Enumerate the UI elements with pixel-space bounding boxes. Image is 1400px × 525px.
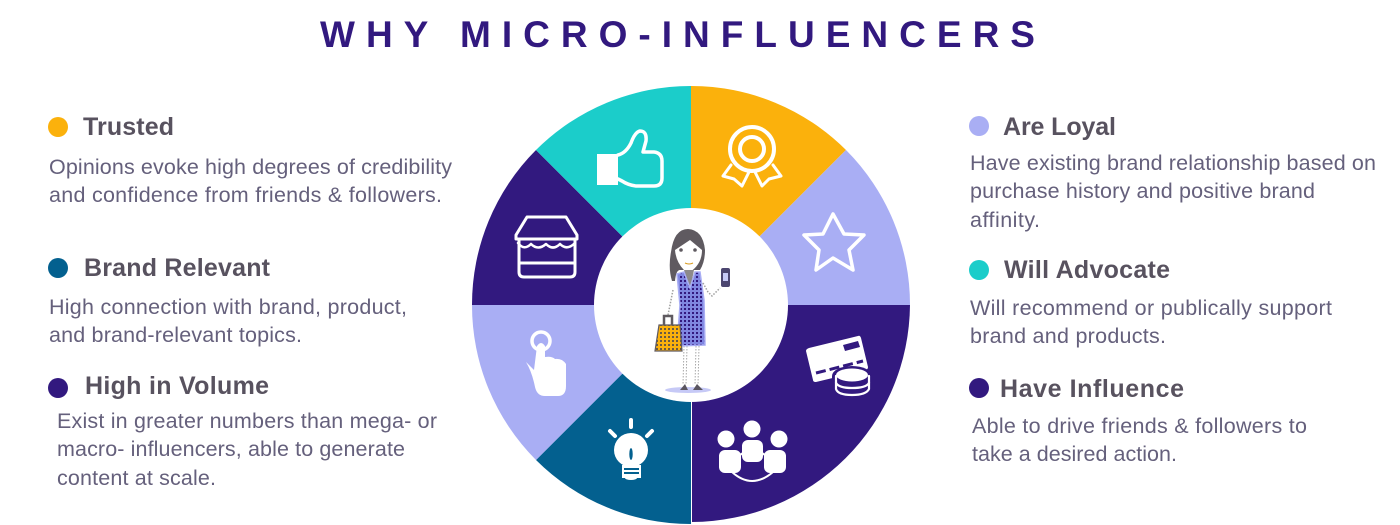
face bbox=[675, 240, 702, 272]
icon: light bulb bbox=[610, 420, 652, 480]
neck bbox=[684, 270, 694, 290]
icon: thumbs up bbox=[597, 131, 662, 186]
hair bbox=[670, 229, 705, 281]
icon: tap hand bbox=[526, 332, 566, 396]
item: Trusted: Opinions evoke high degrees of credibility bbox=[49, 155, 452, 179]
shoes bbox=[680, 384, 703, 390]
item: Will Advocate: Will Advocate bbox=[1004, 256, 1170, 284]
icon: award ribbon bbox=[723, 127, 781, 186]
donut wheel bbox=[472, 86, 910, 524]
item: Have Influence bbox=[969, 375, 1307, 466]
arms bbox=[668, 283, 720, 315]
item: Trusted bbox=[48, 113, 452, 207]
item: Are Loyal: Have existing brand relationship based on bbox=[970, 151, 1376, 175]
icon: star bbox=[804, 214, 864, 270]
legs bbox=[683, 346, 699, 385]
title: WHY MICRO-INFLUENCERS bbox=[320, 14, 1035, 55]
item: High in Volume: content at scale. bbox=[57, 466, 216, 490]
icon: storefront bbox=[516, 217, 577, 277]
item: Trusted: Trusted bbox=[83, 113, 174, 141]
item: High in Volume bbox=[48, 372, 437, 490]
phone bbox=[721, 268, 730, 287]
item: High in Volume: High in Volume bbox=[85, 372, 269, 400]
item: Brand Relevant bbox=[48, 254, 407, 347]
illustration: woman with bag and phone bbox=[655, 229, 730, 393]
item: Will Advocate: brand and products. bbox=[970, 324, 1166, 348]
item: High in Volume: macro- influencers, able to generate bbox=[57, 437, 405, 461]
item: Are Loyal: affinity. bbox=[970, 208, 1040, 232]
dress bbox=[677, 272, 705, 346]
item: Are Loyal bbox=[969, 113, 1376, 232]
icon: credit card and coins bbox=[806, 336, 872, 398]
item: Are Loyal: purchase history and positive brand bbox=[970, 179, 1315, 203]
item: Will Advocate: Will recommend or publically support bbox=[970, 296, 1332, 320]
item: Are Loyal: Are Loyal bbox=[1003, 113, 1116, 141]
item: Brand Relevant: High connection with brand, product, bbox=[49, 295, 407, 319]
item: Have Influence: take a desired action. bbox=[972, 442, 1177, 466]
item: Have Influence: Able to drive friends & followers to bbox=[972, 414, 1307, 438]
bag bbox=[664, 316, 672, 325]
item: High in Volume: Exist in greater numbers than mega- or bbox=[57, 409, 437, 433]
panel: left column bbox=[48, 113, 452, 490]
panel: right column bbox=[969, 113, 1376, 466]
item: Have Influence: Have Influence bbox=[1000, 375, 1184, 403]
item: Brand Relevant: and brand-relevant topics. bbox=[49, 323, 302, 347]
item: Trusted: and confidence from friends & followers. bbox=[49, 183, 442, 207]
icon: group of people bbox=[718, 420, 788, 481]
shadow bbox=[665, 387, 711, 393]
item: Brand Relevant: Brand Relevant bbox=[84, 254, 271, 282]
item: Will Advocate bbox=[969, 256, 1332, 348]
